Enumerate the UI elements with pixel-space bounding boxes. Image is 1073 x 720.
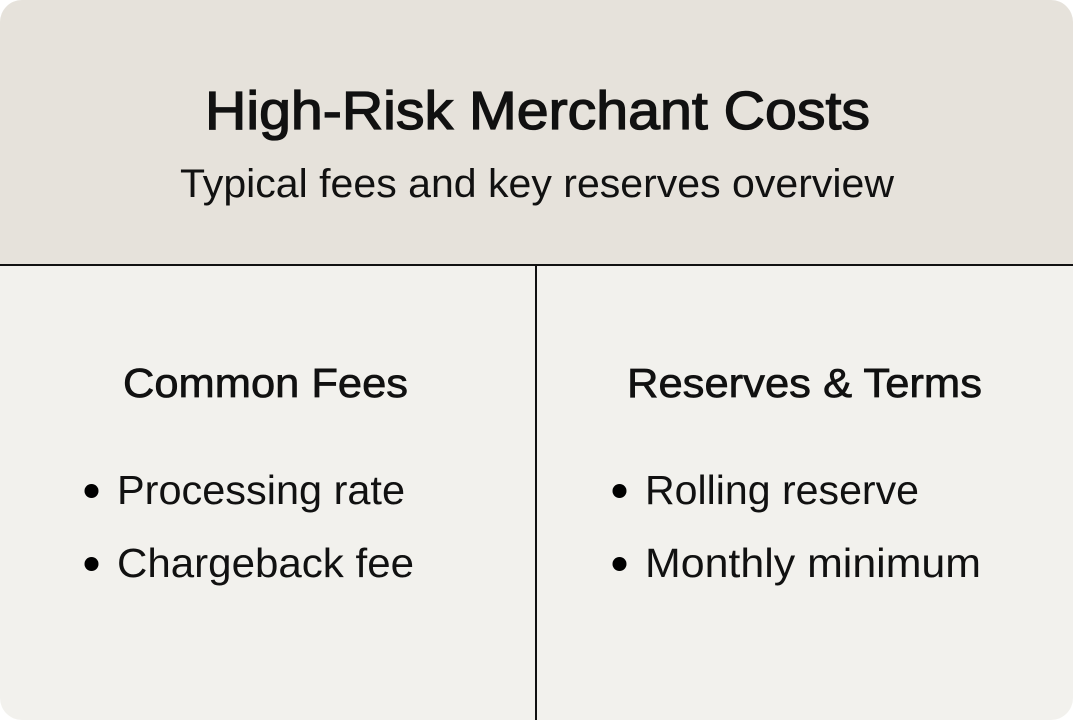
- title: High-Risk Merchant Costs: [205, 81, 870, 141]
- panel: header: [0, 0, 1073, 265]
- subtitle: Typical fees and key reserves overview: [180, 162, 894, 206]
- list item: monthly minimum: Monthly minimum: [645, 540, 981, 586]
- heading: common fees: Common Fees: [123, 360, 408, 406]
- panel: reserves and terms: [536, 266, 1073, 720]
- list item: processing rate: Processing rate: [117, 467, 405, 513]
- panel: common fees: [0, 266, 536, 720]
- list item: rolling reserve: Rolling reserve: [645, 467, 919, 513]
- heading: reserves and terms: Reserves & Terms: [627, 360, 982, 406]
- list item: chargeback fee: Chargeback fee: [117, 540, 414, 586]
